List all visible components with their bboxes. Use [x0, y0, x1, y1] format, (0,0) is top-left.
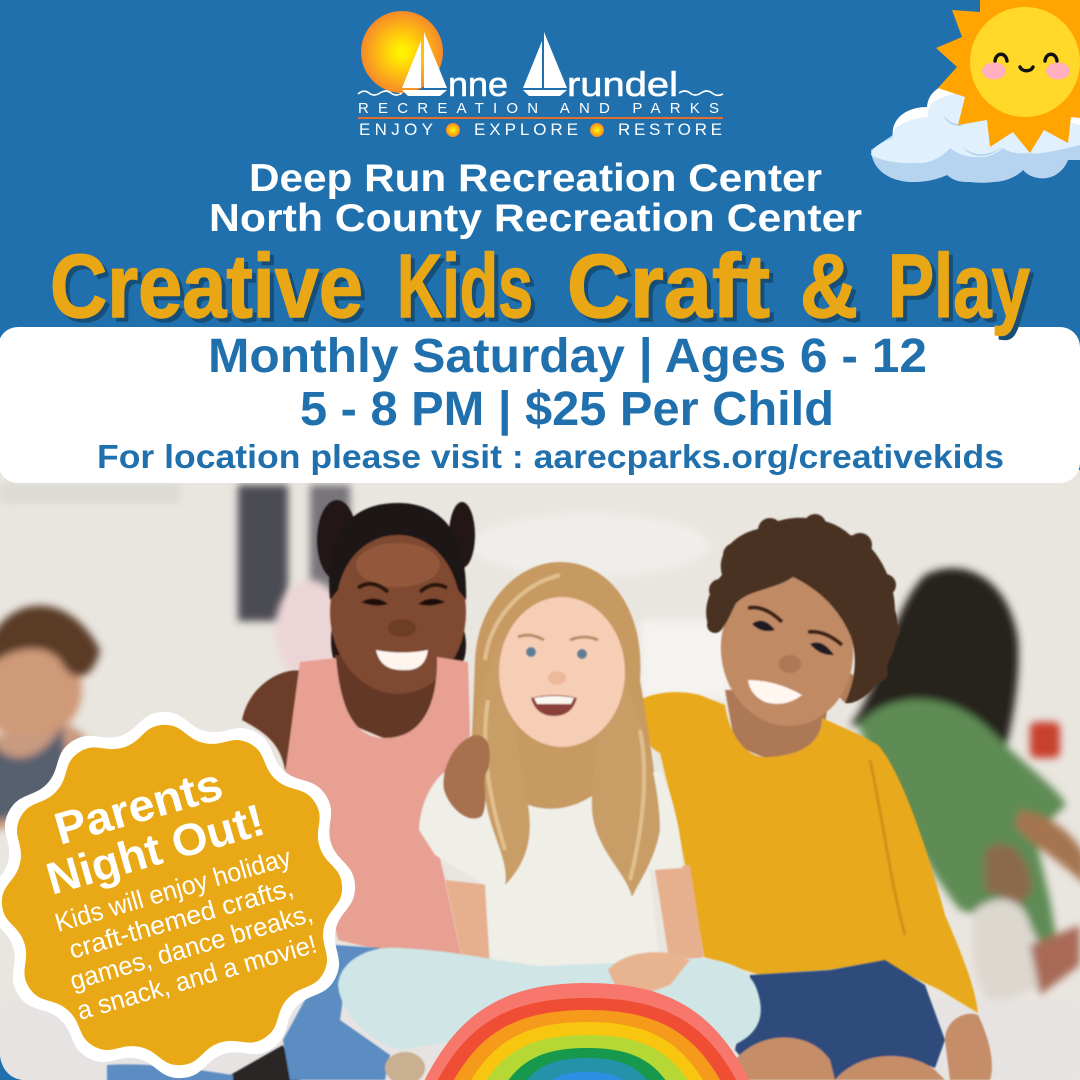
eyes and mouth	[995, 54, 1057, 71]
nose	[779, 655, 801, 673]
title: &	[800, 237, 858, 337]
logo name: rundel: rundel	[567, 66, 678, 104]
cheeks	[982, 62, 1070, 80]
location headings	[209, 157, 862, 240]
badge body text: craft-themed crafts,	[65, 872, 297, 965]
logo name: nne: nne	[448, 66, 508, 104]
photo: three smiling children	[0, 470, 1080, 1080]
long strands	[474, 640, 660, 897]
smile	[376, 650, 428, 670]
girl in pink tank top	[242, 500, 475, 963]
hair puffs and side hair	[317, 500, 475, 668]
face	[713, 568, 861, 732]
sun rays	[936, 0, 1080, 153]
white t-shirt	[419, 770, 682, 967]
arm	[242, 670, 312, 780]
smile	[531, 695, 577, 716]
logo: Anne Arundel Recreation and Parks	[358, 11, 723, 139]
title: Kids	[401, 241, 537, 341]
title: Craft	[567, 237, 770, 337]
light blue pants	[338, 948, 761, 1050]
eyes	[526, 647, 536, 657]
logo subtitle: RECREATION AND PARKS	[358, 100, 719, 117]
nose	[548, 671, 566, 685]
boy's hand on shoulder	[443, 735, 490, 819]
badge body text: Kids will enjoy holiday	[51, 842, 294, 938]
title: Kids	[397, 237, 533, 337]
lighter hair streaks	[485, 575, 644, 880]
boy's shorts and legs	[735, 960, 992, 1080]
badge body text	[51, 842, 320, 1026]
eyes	[752, 621, 834, 655]
forehead shine	[356, 543, 440, 587]
title	[50, 237, 1034, 341]
title: Creative	[54, 241, 367, 341]
floor shadow, jeans and shoe	[107, 945, 425, 1080]
pink tank top	[285, 657, 470, 963]
girl's hand	[608, 952, 690, 992]
boy in yellow shirt	[628, 514, 978, 1013]
blurred girl at right	[850, 568, 1080, 1000]
logo tagline	[359, 120, 722, 139]
logo tagline: EXPLORE	[474, 120, 578, 139]
curly hair	[706, 514, 900, 703]
schedule line: Monthly Saturday | Ages 6 - 12	[208, 330, 927, 383]
neck	[725, 690, 830, 760]
brows	[518, 635, 598, 640]
location headings: Deep Run Recreation Center	[249, 157, 822, 200]
info band	[0, 327, 1080, 483]
sleeve fold shade	[870, 760, 905, 935]
badge heading: Parents	[49, 758, 228, 855]
sailboat two	[523, 32, 567, 96]
logo waves	[358, 91, 723, 95]
title: Play	[888, 237, 1030, 337]
callout badge: Parents Night Out	[0, 703, 364, 1080]
ear	[838, 673, 858, 703]
sailboat one	[402, 32, 447, 96]
back hair	[470, 562, 660, 900]
arms below sleeves	[445, 865, 704, 967]
smile	[748, 680, 802, 704]
sun face disc	[970, 7, 1080, 117]
badge body text: a snack, and a movie!	[73, 929, 320, 1026]
blurred boy at left	[0, 606, 100, 830]
time and price line: 5 - 8 PM | $25 Per Child	[300, 383, 834, 436]
logo tagline: RESTORE	[618, 120, 722, 139]
rounded photo corner	[0, 1056, 22, 1080]
title: Play	[892, 241, 1034, 341]
badge heading: Night Out!	[41, 794, 270, 905]
photo backdrop: classroom wall and floor	[0, 470, 1080, 1080]
icon: smiling sun and cloud	[871, 0, 1080, 183]
location headings: North County Recreation Center	[209, 197, 862, 240]
nose	[388, 619, 416, 637]
badge white border	[0, 703, 364, 1080]
title: Craft	[571, 241, 774, 341]
logo rule	[358, 117, 723, 119]
logo sun	[361, 11, 443, 93]
title: Creative	[50, 237, 363, 337]
yellow long-sleeve shirt	[628, 692, 978, 1013]
brows	[748, 608, 842, 645]
badge gold scallop	[0, 716, 351, 1074]
rainbow toy	[422, 983, 752, 1080]
badge body text: games, dance breaks,	[66, 898, 316, 996]
girl with blonde hair	[419, 562, 704, 967]
cloud	[871, 86, 1080, 183]
face	[499, 597, 625, 747]
face	[330, 530, 466, 694]
location line: For location please visit : aarecparks.org/creativekids	[97, 438, 1004, 475]
hair cap	[329, 503, 466, 600]
neck and chest	[335, 655, 450, 745]
brows	[358, 584, 447, 592]
title: &	[804, 241, 862, 341]
logo tagline: ENJOY	[359, 120, 433, 139]
eyes	[361, 598, 445, 606]
